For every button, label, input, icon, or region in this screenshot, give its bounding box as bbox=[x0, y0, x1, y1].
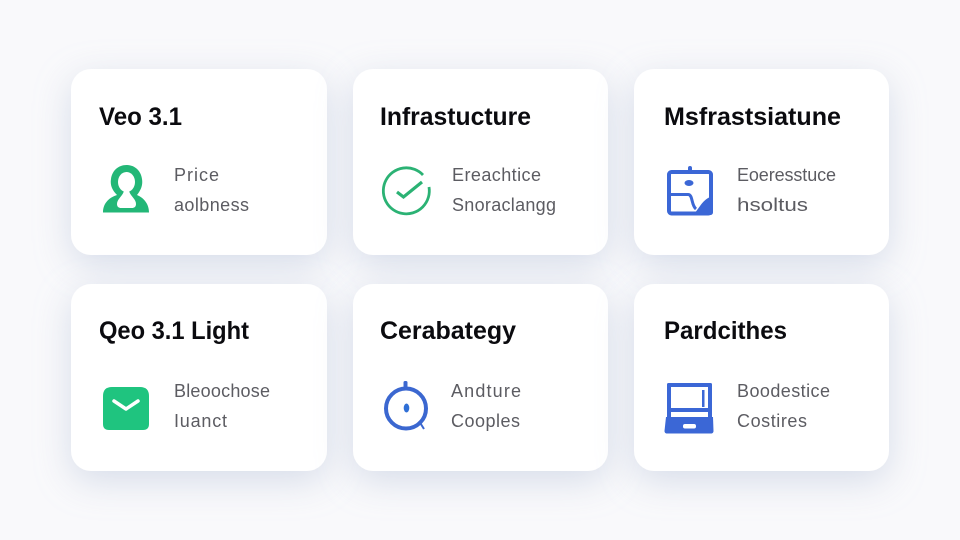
panel: Pardcithes bbox=[634, 284, 889, 471]
text: Iuanct: Iuanct bbox=[174, 411, 227, 431]
heading: Cerabategy: Cerabategy bbox=[380, 317, 516, 345]
text: Cooples: Cooples bbox=[451, 411, 520, 431]
icon: blue document bbox=[669, 166, 713, 215]
heading: Veo 3.1: Veo 3.1 bbox=[99, 103, 182, 131]
panel: Cerabategy bbox=[353, 284, 608, 471]
text: Price: Price bbox=[174, 165, 219, 185]
text: hsoltus: hsoltus bbox=[737, 195, 808, 215]
text: Snoraclang: Snoraclangg bbox=[452, 195, 556, 215]
icon: person bbox=[103, 165, 149, 212]
icon: target circle bbox=[386, 381, 426, 429]
panel: Msfrastsiatune bbox=[634, 69, 889, 255]
panel: Veo 3.1 bbox=[71, 69, 327, 255]
text: aolbness: aolbness bbox=[174, 195, 249, 215]
icon: check circle bbox=[383, 168, 429, 214]
text: Boodestice: Boodestice bbox=[737, 381, 830, 401]
icon: mail bbox=[103, 387, 149, 430]
text: Eoeresstuce: Eoeresstuce bbox=[737, 165, 836, 185]
heading: Qeo 3.1 Light: Qeo 3.1 Light bbox=[99, 317, 250, 345]
icon: laptop bbox=[664, 383, 714, 434]
heading: Msfrastsiatune: Msfrastsiatune bbox=[664, 103, 841, 131]
panel: Qeo 3.1 Light bbox=[71, 284, 327, 471]
text: Bleoochose: Bleoochose bbox=[174, 381, 270, 401]
panel: Infrastucture bbox=[353, 69, 608, 255]
heading: Infrastucture: Infrastucture bbox=[380, 103, 531, 131]
text: Andture: Andture bbox=[451, 381, 521, 401]
heading: Pardcithes: Pardcithes bbox=[664, 317, 787, 345]
text: Costires: Costires bbox=[737, 411, 807, 431]
text: Ereachtice: Ereachtice bbox=[452, 165, 541, 185]
